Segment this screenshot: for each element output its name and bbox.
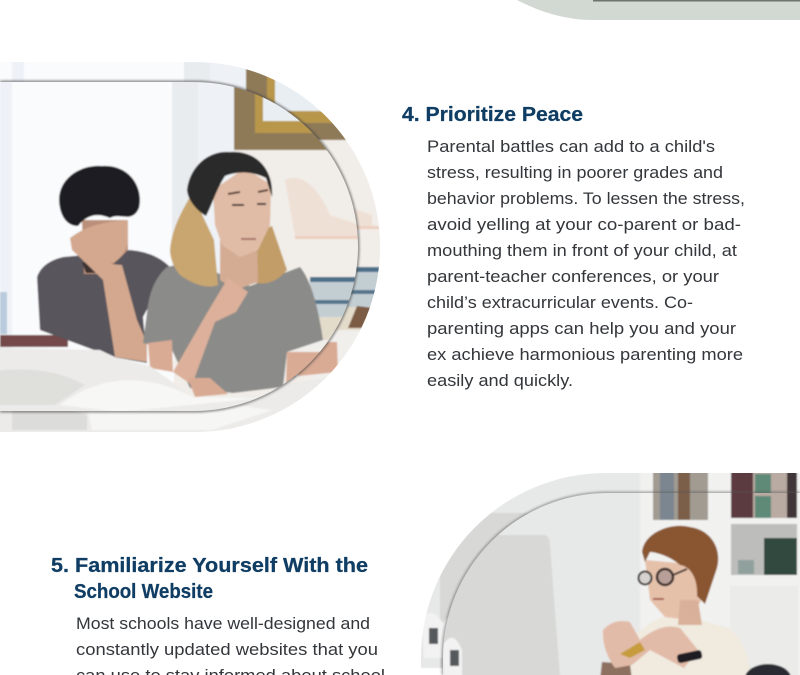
- text block: prioritize peace body: behavior problems. To lessen the stress,: [427, 189, 745, 208]
- text block: school website body: constantly updated websites that you: [76, 640, 378, 659]
- heading: 5. Familiarize Yourself With the School Website: School Website: [74, 580, 213, 603]
- heading: 5. Familiarize Yourself With the School Website: 5. Familiarize Yourself With the: [51, 554, 368, 577]
- photo: woman at computer: [421, 473, 800, 675]
- text block: prioritize peace body: child’s extracurricular events. Co-: [427, 293, 693, 312]
- text block: prioritize peace body: easily and quickly.: [427, 371, 573, 390]
- text block: school website body: [76, 614, 385, 675]
- image: previous section photo edge: [517, 0, 800, 20]
- text block: prioritize peace body: parent-teacher conferences, or your: [427, 267, 719, 286]
- text block: prioritize peace body: stress, resulting in poorer grades and: [427, 163, 723, 182]
- photo: arguing couple on bed: [0, 62, 380, 432]
- text block: prioritize peace body: ex achieve harmonious parenting more: [427, 345, 743, 364]
- text block: prioritize peace body: Parental battles can add to a child's: [427, 137, 715, 156]
- text block: prioritize peace body: parenting apps can help you and your: [427, 319, 736, 338]
- text block: school website body: Most schools have well-designed and: [76, 614, 370, 633]
- heading: 4. Prioritize Peace: 4. Prioritize Peace: [402, 103, 583, 126]
- text block: prioritize peace body: avoid yelling at your co-parent or bad-: [427, 215, 741, 234]
- text block: prioritize peace body: [427, 137, 745, 390]
- text block: prioritize peace body: mouthing them in front of your child, at: [427, 241, 737, 260]
- heading: 5. Familiarize Yourself With the School Website: [51, 554, 368, 603]
